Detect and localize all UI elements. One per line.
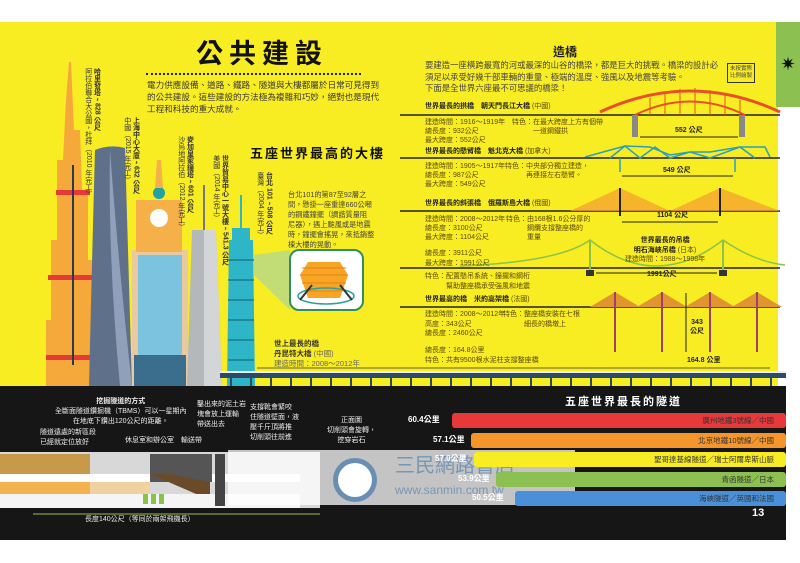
bar: Channel bbox=[515, 491, 786, 506]
side tab: green: ✷ bbox=[780, 54, 796, 74]
watermark text: www.sanmin.com.tw bbox=[395, 483, 504, 497]
bridge: Millau viaduct bbox=[590, 292, 782, 352]
text: 帶送出去 bbox=[197, 421, 225, 428]
intro text: 工程和科技的重大成就。 bbox=[147, 104, 242, 114]
tunnel boring text bbox=[55, 396, 186, 425]
text: 特色：在最大跨度上方有個帶 bbox=[512, 119, 603, 126]
label: One WTC: 美國（2014 年完工） bbox=[213, 155, 220, 222]
text: 高度：343公尺 bbox=[425, 320, 472, 328]
bar: Gotthard bbox=[474, 452, 786, 467]
text: 切削頭會旋轉， bbox=[327, 427, 376, 434]
text: 休息室和辦公室 輸送帶 bbox=[125, 437, 202, 444]
text: 塊會放上運輸 bbox=[197, 411, 239, 418]
label: Abraj Al-Bait: 沙烏地阿拉伯（2012 年完工） bbox=[178, 136, 185, 231]
bridge 1 text: 世界最長的拱橋 朝天門長江大橋 (中國) bbox=[425, 103, 551, 110]
text: damper description: 的鋼鐵鐘擺（調諧質量阻 bbox=[288, 210, 367, 219]
building: Taipei 101 bbox=[227, 195, 290, 386]
side tab: green bbox=[776, 22, 800, 107]
bridge: Chaotianmen arch bbox=[600, 88, 780, 137]
intro text: 的公共建設。這些建設的方法極為複雜和巧妙，絕對也是現代 bbox=[147, 92, 379, 102]
building: Burj Khalifa bbox=[46, 62, 92, 386]
building: One World Trade Center bbox=[187, 185, 222, 386]
text: 幫助整座橋承受強風和地震 bbox=[446, 282, 530, 290]
text: 明石海峽吊橋 (日本) bbox=[634, 246, 696, 254]
tunnel bar chart: 60.4公里 bbox=[408, 415, 440, 424]
text: 最大跨度：1104公尺 bbox=[425, 234, 489, 241]
text: longest bridge bbox=[274, 339, 360, 368]
note box bbox=[727, 63, 755, 83]
text: 特色：中央部分獨立建造， bbox=[505, 163, 589, 170]
label: Abraj Al-Bait: 麥加皇家鐘塔，601 公尺 bbox=[186, 136, 194, 213]
tunnel bar chart: 50.5公里 bbox=[472, 493, 504, 502]
text: damper description: 台北101的第87至92層之 bbox=[288, 190, 366, 199]
intro text: 電力供應設備、道路、鐵路、隧道與大樓都屬於日常可見得到 bbox=[147, 80, 379, 90]
bridge 4 text: 總長度：3911公尺 bbox=[425, 250, 482, 257]
bridge: Russky cable-stayed bbox=[570, 188, 780, 222]
bridges intro bbox=[425, 60, 718, 93]
text: damper description: 尼器），遇上颱風或是地震 bbox=[288, 220, 371, 229]
text: longest bridge: 世上最長的橋 bbox=[274, 339, 319, 348]
text: 建造時間：1916～1919年 bbox=[425, 119, 505, 126]
text: 壓千斤頂將推 bbox=[250, 424, 292, 431]
label: Taipei 101: 臺灣（2004 年完工） bbox=[257, 172, 264, 239]
text: 特色：共有9500根水泥柱支撐整座橋 bbox=[425, 356, 539, 364]
text: 隧道遠處的新區段 bbox=[40, 429, 96, 436]
text: 已經就定位放好 bbox=[40, 439, 89, 446]
building: Shanghai Tower bbox=[89, 146, 132, 386]
text: 最大跨度：549公尺 bbox=[425, 181, 486, 188]
label: Abraj Al-Bait bbox=[178, 136, 194, 231]
label: One WTC: 世界貿易中心一號大樓，541.3 公尺 bbox=[222, 155, 228, 265]
text: 最大跨度：552公尺 bbox=[425, 137, 486, 144]
text: 總長度：932公尺 bbox=[425, 128, 479, 135]
watermark text bbox=[395, 455, 515, 497]
heading: tallest buildings: 五座世界最高的大樓 bbox=[250, 146, 385, 161]
text: 建造時間：1988～1998年 bbox=[625, 256, 705, 263]
text: 總長度：987公尺 bbox=[425, 172, 479, 179]
tunnel boring text: 挖掘隧道的方式 bbox=[96, 398, 145, 405]
bridges intro: 須足以承受好幾千部車輛的重量、極端的溫度、強風以及地震等考驗。 bbox=[425, 72, 685, 82]
text: damper description: 時，鐘擺會搖晃，來抵銷整 bbox=[288, 230, 374, 239]
page number: 13 bbox=[752, 507, 764, 519]
heading: bridges: 造橋 bbox=[553, 45, 577, 59]
tunnel boring text: 全斷面隧道鑽掘機（TBMS）可以一星期內 bbox=[55, 408, 186, 415]
building: Abraj Al-Bait clock tower bbox=[132, 160, 188, 386]
bar: Channel: 海峽隧道／英國和法國 bbox=[699, 494, 774, 503]
text: 細長的橋墩上 bbox=[524, 320, 566, 328]
text: 建造時間：2008～2012年 bbox=[425, 216, 505, 223]
bar: Seikan bbox=[496, 472, 786, 487]
text: 總長度：164.8公里 bbox=[425, 347, 485, 354]
text: 正面圖 bbox=[341, 417, 362, 424]
bridge 5 text: 世界最高的橋 米約高架橋 (法國) bbox=[425, 296, 530, 303]
text: damper description bbox=[288, 190, 374, 249]
text: 343 bbox=[691, 319, 703, 326]
bar: Guangzhou: 廣州地鐵3號線／中國 bbox=[702, 416, 774, 425]
label: Burj Khalifa: 阿拉伯聯合大公國，杜拜（2010 年完工） bbox=[85, 68, 92, 198]
tunnel bar chart: 57.1公里 bbox=[433, 435, 465, 444]
text: 總長度：2460公尺 bbox=[425, 330, 483, 337]
bridge 4 text bbox=[425, 249, 490, 266]
text: 552 公尺 bbox=[675, 127, 703, 134]
text: 重量 bbox=[527, 234, 541, 241]
bar: Seikan: 青函隧道／日本 bbox=[722, 475, 774, 484]
label: Shanghai Tower: 中國（2015 年完工） bbox=[124, 117, 131, 184]
tunnel bar chart: 57.0公里 bbox=[435, 454, 467, 463]
label: Burj Khalifa bbox=[85, 68, 101, 198]
label: Taipei 101: 台北 101，508 公尺 bbox=[266, 172, 272, 234]
dotted divider bbox=[146, 73, 361, 75]
bridge: Akashi Kaikyo suspension bbox=[460, 240, 785, 276]
bar: Beijing bbox=[471, 433, 786, 448]
text: 鑿出來的泥土岩 bbox=[197, 401, 246, 408]
illustration: tuned mass damper bbox=[290, 250, 363, 310]
viaduct: Danyang-Kunshan bridge bbox=[220, 368, 786, 386]
note box: 未按實際 bbox=[730, 66, 752, 72]
heading: longest tunnels: 五座世界最長的隧道 bbox=[565, 396, 682, 408]
text: 建造時間：1905～1917年 bbox=[425, 163, 505, 170]
label: Burj Khalifa: 哈里發塔，828 公尺 bbox=[94, 68, 100, 131]
bridges intro: 下面是全世界六座最不可思議的橋梁！ bbox=[425, 83, 567, 93]
bridges intro: 要建造一座橫跨最寬的河或最深的山谷的橋梁，都是巨大的挑戰。橋梁的設計必 bbox=[425, 60, 718, 70]
bridge 4 text: 最大跨度：1991公尺 bbox=[425, 260, 490, 266]
bridge: Quebec cantilever bbox=[585, 146, 770, 176]
text: 特色：配置懸吊系統、鐘擺和鋼桁 bbox=[425, 273, 530, 280]
text: 長度140公尺（等同於兩架飛機長） bbox=[85, 516, 195, 523]
text: 1991公尺 bbox=[647, 271, 677, 278]
background: yellow panel bbox=[0, 22, 778, 386]
tunnel cross-section diagram bbox=[0, 452, 320, 514]
note box: 比例繪製 bbox=[730, 73, 752, 79]
bar: Beijing: 北京地鐵10號線／中國 bbox=[698, 436, 774, 445]
text: 164.8 公里 bbox=[687, 357, 720, 364]
text: 特色：整座橋安裝在七根 bbox=[503, 311, 580, 318]
text: 一道鋼鐵拱 bbox=[533, 128, 568, 135]
intro text bbox=[147, 80, 379, 114]
text: 鋼纜支撐整座橋的 bbox=[527, 225, 583, 232]
text: 支撐靴會緊咬 bbox=[250, 404, 292, 411]
label: Shanghai Tower: 上海中心大廈，632 公尺 bbox=[132, 117, 140, 194]
bar: Guangzhou bbox=[452, 413, 786, 428]
text: 特色：由168根1.6公分厚的 bbox=[506, 216, 590, 223]
background: black tunnel panel bbox=[0, 386, 786, 540]
text: 公尺 bbox=[690, 328, 704, 335]
tunnel boring text: 在地底下鑽出120公尺的距離。 bbox=[73, 418, 169, 425]
title: 公共建設 bbox=[196, 39, 328, 69]
text: 切削頭往前進 bbox=[250, 434, 292, 441]
text: 建造時間：2008～2012年 bbox=[425, 311, 505, 318]
watermark text: 三民網路書店 bbox=[395, 455, 515, 477]
bridge lines (decks) bbox=[400, 115, 780, 307]
text: 挖穿岩石 bbox=[338, 437, 366, 444]
text: 住隧道壁面，液 bbox=[250, 414, 299, 421]
text: longest bridge: 建造時間：2008～2012年 bbox=[274, 359, 360, 368]
text: 549 公尺 bbox=[663, 167, 691, 174]
bar: Gotthard: 聖哥達基線隧道／瑞士阿爾卑斯山脈 bbox=[654, 455, 774, 464]
label: Shanghai Tower bbox=[124, 117, 140, 194]
text: 1104 公尺 bbox=[657, 212, 688, 219]
bridge 3 text: 世界最長的斜張橋 俄羅斯島大橋 (俄國) bbox=[425, 200, 551, 207]
tunnel bar chart: 53.9公里 bbox=[458, 474, 490, 483]
text: 再連接左右懸臂。 bbox=[526, 172, 582, 179]
text: damper description: 棟大樓的晃動。 bbox=[288, 240, 338, 249]
text: longest bridge: 丹昆特大橋 (中國) bbox=[274, 349, 334, 358]
text: damper description: 間，懸掛一座重達660公噸 bbox=[288, 200, 372, 209]
text: 世界最長的吊橋 bbox=[641, 237, 690, 244]
label: Taipei 101 bbox=[257, 172, 273, 239]
label: One WTC bbox=[213, 155, 229, 266]
watermark overlay bbox=[228, 450, 575, 505]
bridge 2 text: 世界最長的懸臂橋 魁北克大橋 (加拿大) bbox=[425, 148, 551, 155]
tunnel bar chart bbox=[408, 413, 786, 506]
text: 總長度：3100公尺 bbox=[425, 225, 483, 232]
